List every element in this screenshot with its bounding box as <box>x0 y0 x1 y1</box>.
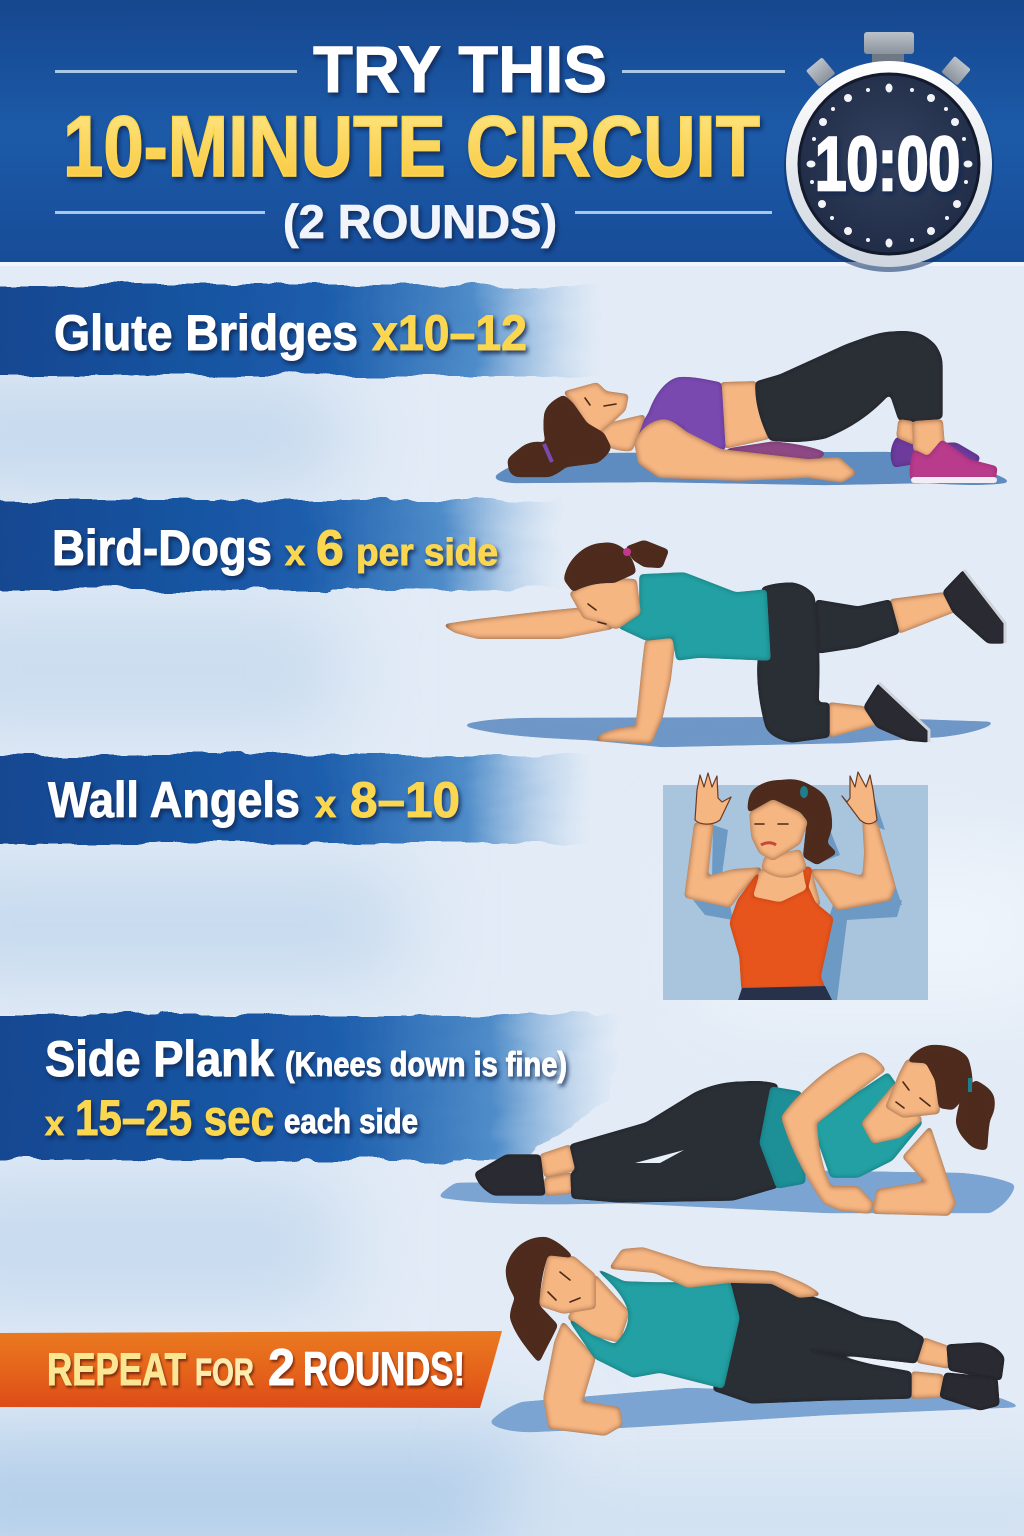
illustration: glute bridge <box>494 332 1011 485</box>
exercise band: bird-dogs <box>0 500 560 590</box>
reps: x 6 per side: per side <box>356 532 498 574</box>
illustration: side plank, leg lifted <box>490 1237 1022 1435</box>
reps: x 6 per side: 6 <box>316 520 344 576</box>
note: each side: each side <box>284 1103 418 1141</box>
callout: repeat for 2 rounds: REPEAT <box>47 1344 186 1395</box>
callout: repeat for 2 rounds: 2 <box>268 1339 295 1397</box>
reps: x 8-10: 8–10 <box>350 772 460 828</box>
reps: 15-25 sec: x <box>45 1105 64 1143</box>
label: wall angels: Wall Angels <box>48 772 300 828</box>
title: 10-minute circuit: 10-MINUTE CIRCUIT <box>63 99 760 195</box>
label: glute bridges: Glute Bridges <box>54 305 358 361</box>
icon: stopwatch <box>784 32 994 272</box>
header banner <box>0 0 1024 266</box>
illustration: wall angels <box>663 772 928 1000</box>
title: try this: TRY THIS <box>313 32 607 106</box>
exercise band: wall angels <box>0 755 590 843</box>
exercise band: glute bridges <box>0 285 600 375</box>
callout: repeat for 2 rounds: FOR <box>195 1352 254 1394</box>
stopwatch time: 10:00 <box>815 122 960 207</box>
illustration: side plank, knees down <box>438 1045 1015 1215</box>
reps: x 6 per side: x <box>285 532 305 573</box>
callout: repeat for 2 rounds: ROUNDS! <box>303 1342 465 1395</box>
callout: repeat for 2 rounds <box>0 1331 502 1408</box>
reps: x10-12: x10–12 <box>372 305 527 361</box>
label: side plank: Side Plank <box>45 1031 274 1087</box>
reps: x 8-10: x <box>315 784 336 826</box>
illustration: bird-dog <box>444 540 1005 747</box>
exercise band: side plank <box>0 1015 620 1160</box>
reps: 15-25 sec: 15–25 sec <box>75 1090 274 1146</box>
title: 2 rounds: (2 ROUNDS) <box>283 195 557 248</box>
note: knees down: (Knees down is fine) <box>285 1046 567 1084</box>
label: bird-dogs: Bird-Dogs <box>52 520 272 576</box>
